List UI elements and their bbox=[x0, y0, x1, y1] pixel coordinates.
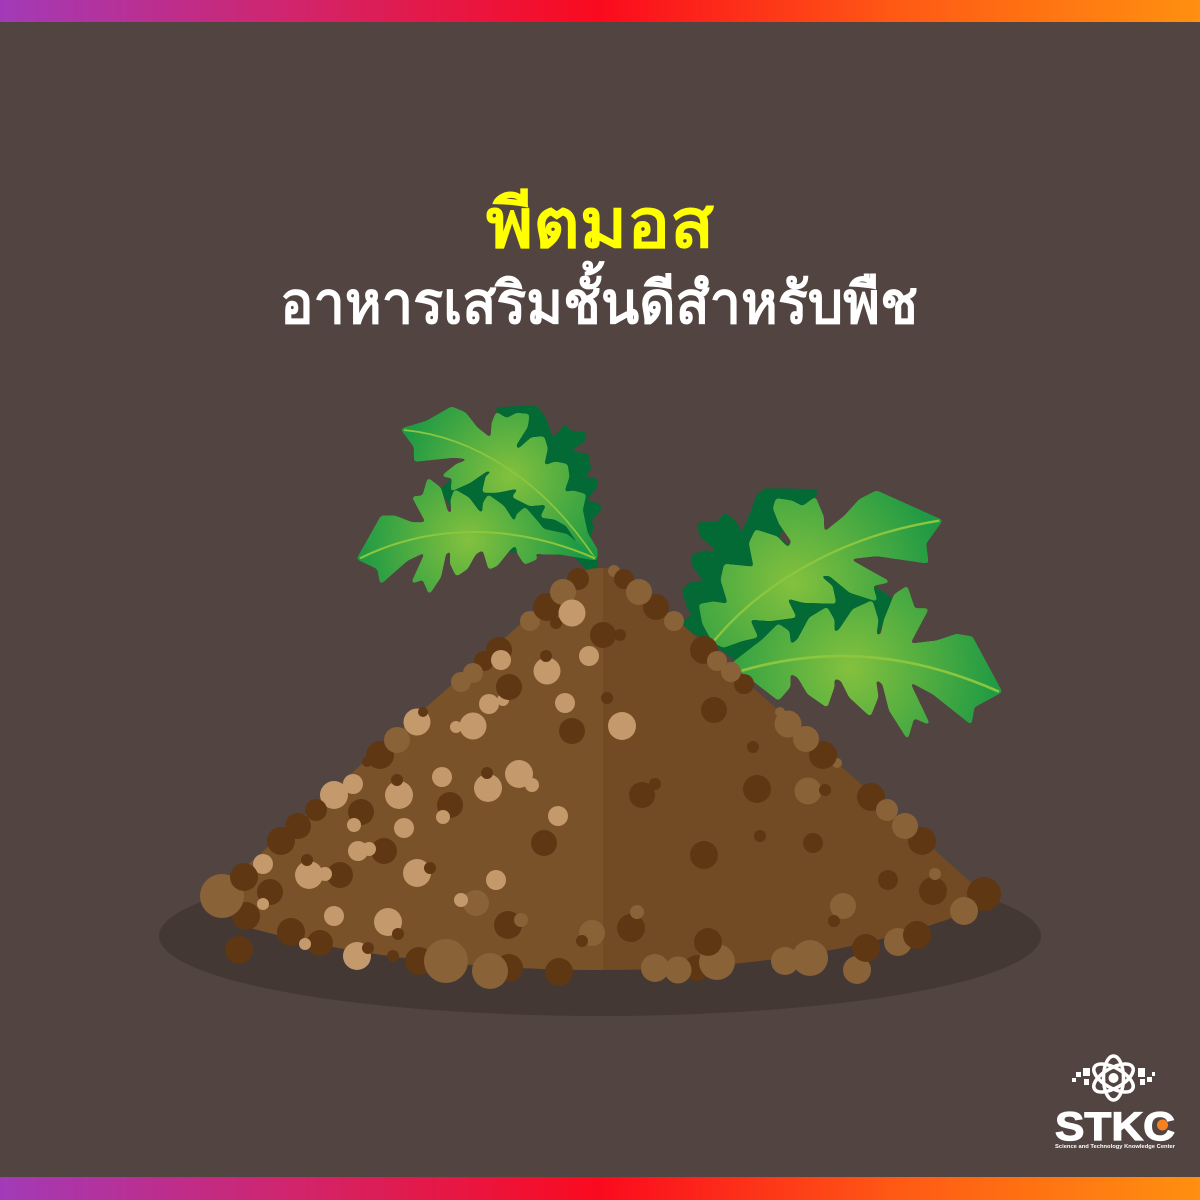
pile body left bbox=[225, 568, 603, 970]
ground shadow bbox=[159, 856, 1041, 1016]
subtitle: อาหารเสริมชั้นดีสำหรับพืช bbox=[280, 261, 918, 336]
logo wordmark: STKC bbox=[1055, 1105, 1175, 1149]
pile body right bbox=[603, 568, 985, 970]
bottom gradient bar bbox=[0, 1177, 1200, 1200]
icon: pixel squares bbox=[1072, 1068, 1155, 1085]
logo orange dot bbox=[1157, 1120, 1168, 1130]
dark soil granules bbox=[225, 568, 1001, 986]
icon: left leaves bbox=[358, 406, 600, 593]
icon: atom bbox=[1089, 1056, 1138, 1100]
top gradient bar bbox=[0, 0, 1200, 22]
title: พีตมอส bbox=[486, 186, 715, 262]
soil pile bbox=[200, 565, 1001, 989]
top-layer granules bbox=[200, 579, 978, 989]
mid soil granules bbox=[451, 565, 912, 984]
icon: right leaves bbox=[682, 489, 1001, 737]
logo tagline: Science and Technology Knowledge Center bbox=[1055, 1144, 1176, 1150]
logo: STKC bbox=[1055, 1056, 1176, 1150]
light soil granules bbox=[253, 646, 636, 970]
